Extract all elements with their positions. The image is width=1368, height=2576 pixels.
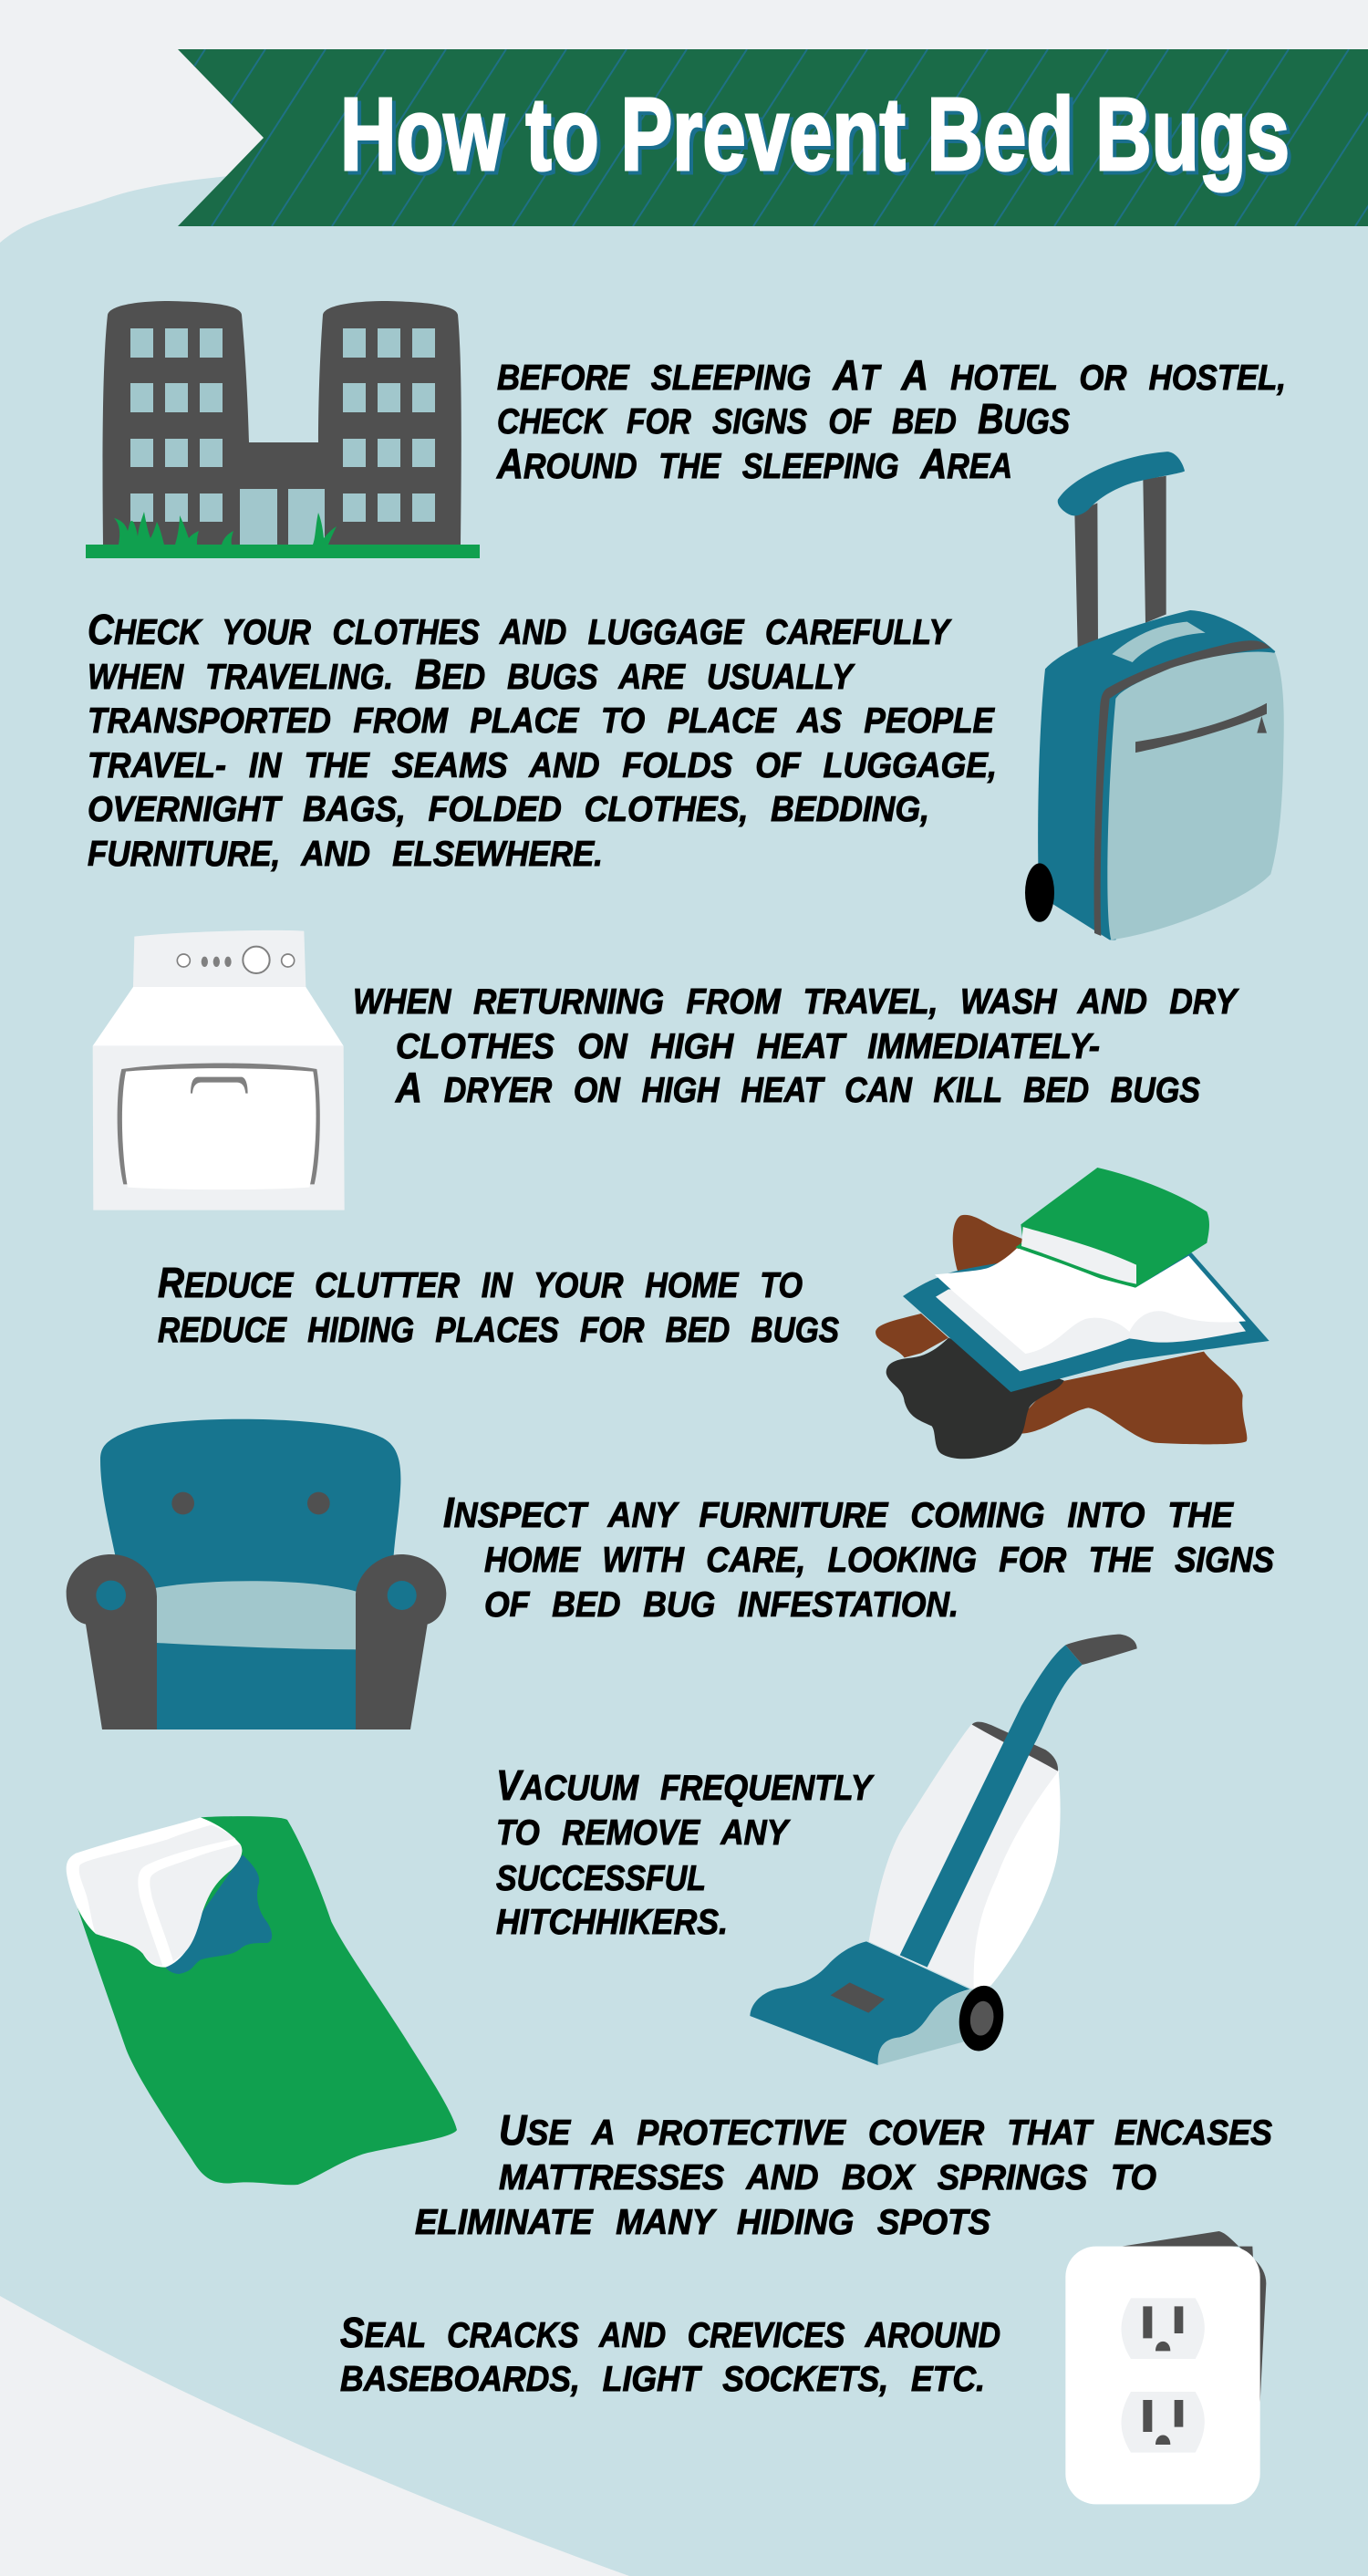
- text: seal cracks: SEAL CRACKS AND CREVICES AROUND: [340, 2309, 1000, 2356]
- text: check luggage: TRAVEL- IN THE SEAMS AND FOLDS OF LUGGAGE,: [88, 746, 997, 785]
- icon: mattress cover: [67, 1816, 457, 2185]
- text: vacuum: [496, 1761, 875, 1942]
- icon: suitcase: [1025, 452, 1284, 940]
- text: wash and dry: [353, 982, 1239, 1111]
- text: inspect furniture: OF BED BUG INFESTATION.: [484, 1585, 959, 1625]
- text: protective cover: MATTRESSES AND BOX SPRINGS TO: [499, 2158, 1156, 2197]
- text: wash and dry: A DRYER ON HIGH HEAT CAN KILL BED BUGS: [395, 1064, 1200, 1111]
- text: check luggage: TRANSPORTED FROM PLACE TO PLACE AS PEOPLE: [88, 701, 995, 741]
- text: inspect furniture: HOME WITH CARE, LOOKING FOR THE SIGNS: [484, 1541, 1274, 1580]
- icon: vacuum cleaner: [750, 1635, 1137, 2065]
- text: vacuum: VACUUM FREQUENTLY: [496, 1761, 875, 1809]
- text: check luggage: WHEN TRAVELING. BED BUGS ARE USUALLY: [88, 650, 855, 698]
- text: inspect furniture: INSPECT ANY FURNITURE COMING INTO THE: [443, 1489, 1234, 1536]
- text: seal cracks: [340, 2309, 1000, 2399]
- text: protective cover: ELIMINATE MANY HIDING SPOTS: [415, 2203, 990, 2242]
- text: protective cover: USE A PROTECTIVE COVER THAT ENCASES: [499, 2106, 1272, 2154]
- title banner: [91, 49, 1368, 226]
- icon: wall outlet: [1065, 2231, 1266, 2504]
- text: check luggage: FURNITURE, AND ELSEWHERE.: [88, 835, 603, 874]
- text: protective cover: [415, 2106, 1272, 2242]
- text: check luggage: [88, 606, 997, 874]
- text: reduce clutter: [158, 1259, 839, 1350]
- text: check at hotels: AROUND THE SLEEPING AREA: [496, 440, 1012, 487]
- text: seal cracks: BASEBOARDS, LIGHT SOCKETS, ETC.: [340, 2360, 985, 2399]
- icon: dryer: [93, 930, 345, 1210]
- text: vacuum: TO REMOVE ANY: [496, 1813, 791, 1853]
- text: check luggage: OVERNIGHT BAGS, FOLDED CLOTHES, BEDDING,: [88, 790, 929, 829]
- text: check at hotels: CHECK FOR SIGNS OF BED BUGS: [497, 395, 1070, 442]
- icon: hotel: [86, 301, 480, 558]
- text: reduce clutter: REDUCE CLUTTER IN YOUR HOME TO: [158, 1259, 803, 1306]
- icon: clutter pile: [876, 1168, 1270, 1459]
- text: reduce clutter: REDUCE HIDING PLACES FOR BED BUGS: [158, 1311, 839, 1350]
- text: check at hotels: [496, 351, 1286, 487]
- text: check luggage: CHECK YOUR CLOTHES AND LUGGAGE CAREFULLY: [88, 606, 952, 653]
- text: inspect furniture: [443, 1489, 1274, 1625]
- icon: armchair: [67, 1419, 446, 1729]
- text: vacuum: HITCHHIKERS.: [496, 1903, 728, 1942]
- text: vacuum: SUCCESSFUL: [496, 1859, 706, 1898]
- text: check at hotels: BEFORE SLEEPING AT A HOTEL OR HOSTEL,: [497, 351, 1286, 399]
- text: wash and dry: WHEN RETURNING FROM TRAVEL, WASH AND DRY: [353, 982, 1239, 1022]
- text: wash and dry: CLOTHES ON HIGH HEAT IMMEDIATELY-: [396, 1027, 1100, 1066]
